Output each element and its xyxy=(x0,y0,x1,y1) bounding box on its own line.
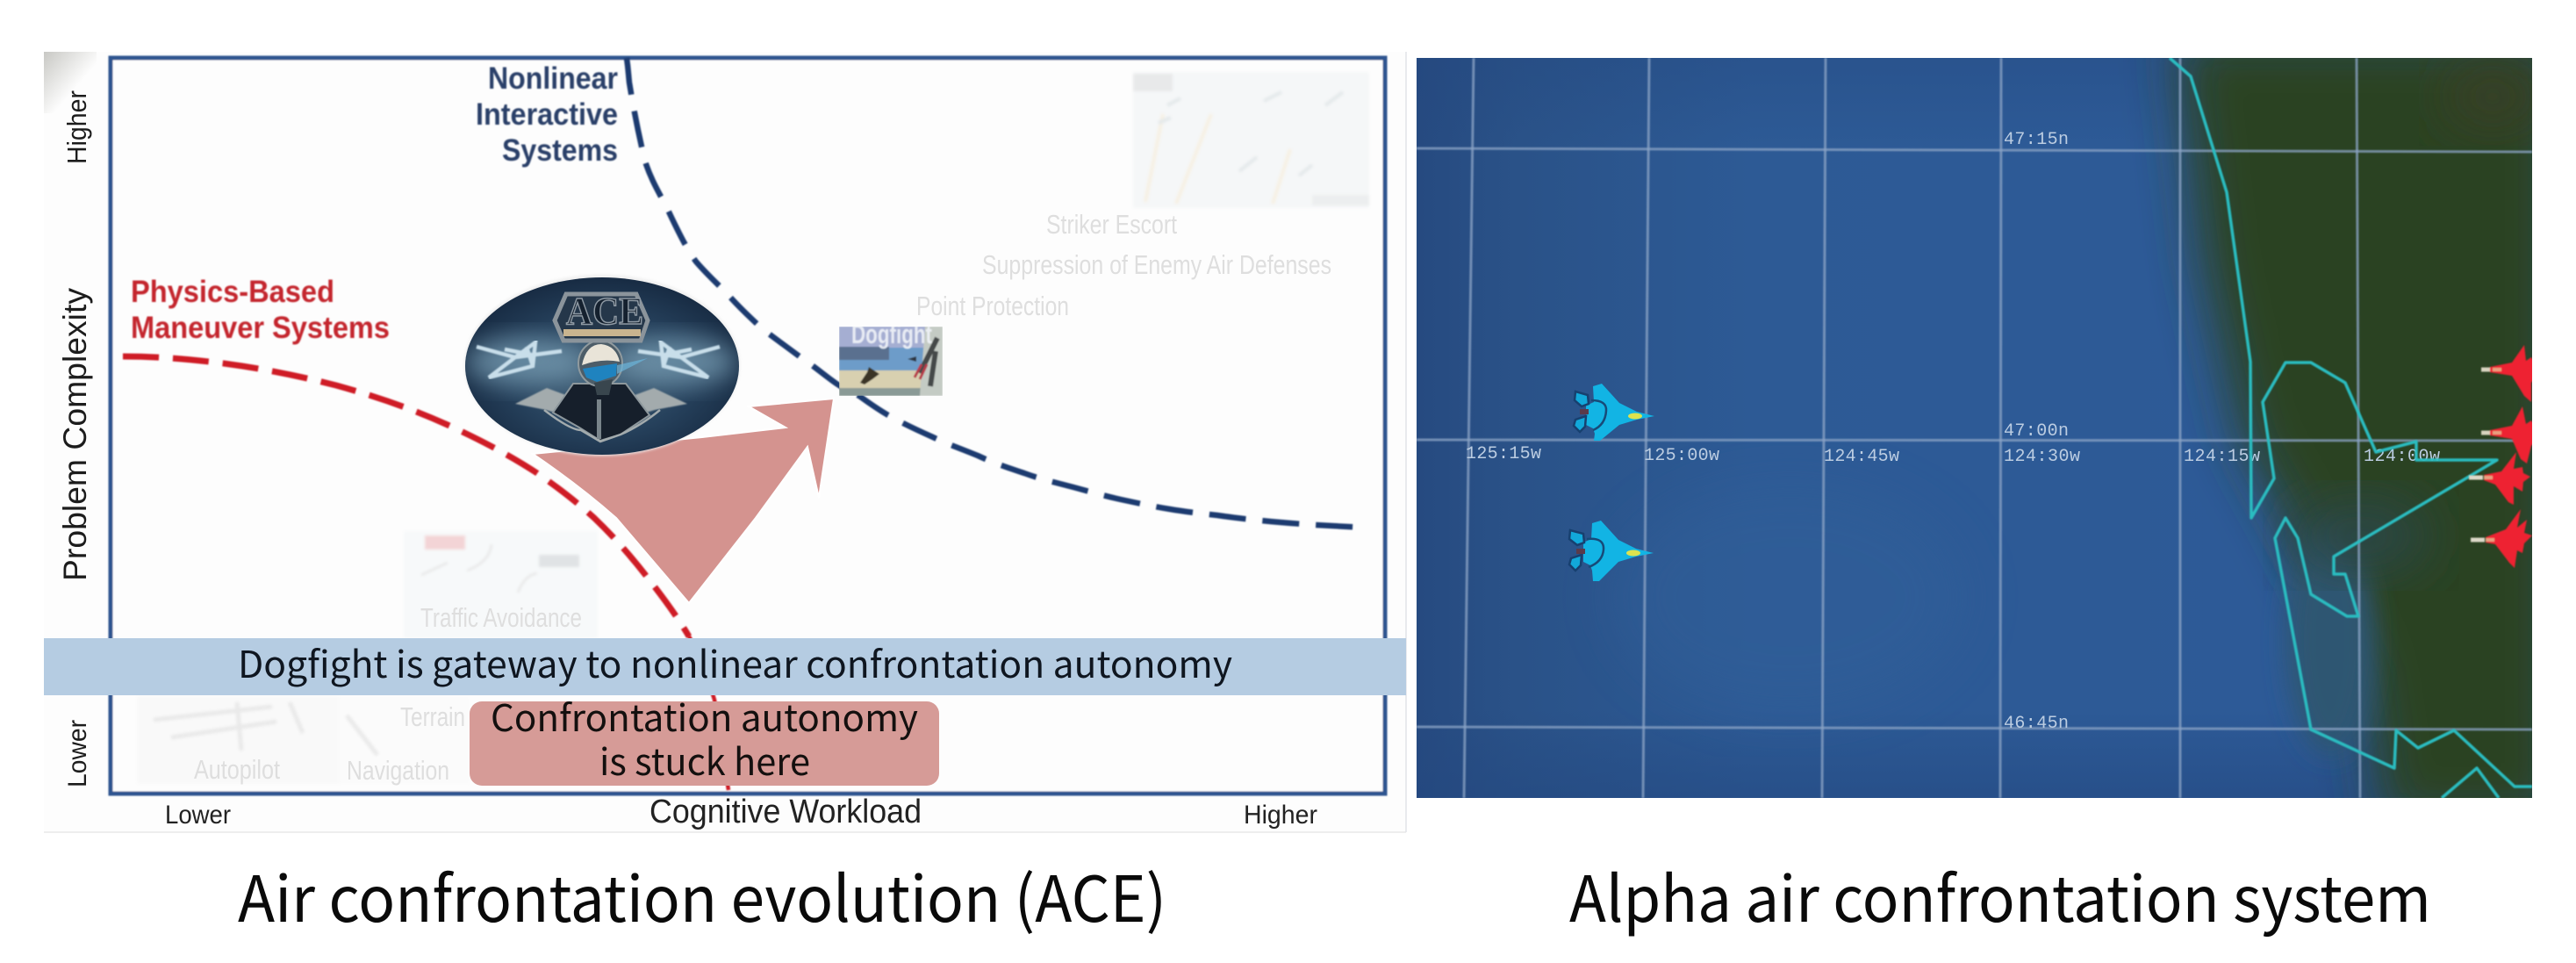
label: nonlinear interactive systems: Interactive xyxy=(476,97,618,132)
map coordinate labels: 125:00w xyxy=(1644,446,1719,466)
map coordinate labels: 124:45w xyxy=(1824,447,1899,467)
label: nonlinear interactive systems xyxy=(476,61,618,168)
y-axis title: problem complexity: Problem Complexity xyxy=(57,288,93,581)
icon: red fighter jet 2 xyxy=(2481,406,2535,464)
arrow: evolution toward dogfight xyxy=(533,399,834,603)
icon: red fighter jet 4 xyxy=(2471,509,2532,568)
faint task labels: Striker Escort xyxy=(1046,209,1177,240)
label: nonlinear interactive systems: Nonlinear xyxy=(488,61,618,96)
icon: blue fighter jet 1 xyxy=(1574,384,1654,441)
callout box: confrontation autonomy is stuck here: is stuck here xyxy=(599,733,810,787)
callout box: confrontation autonomy is stuck here: Confrontation autonomy xyxy=(491,689,918,743)
map coordinate labels: 46:45n xyxy=(2004,714,2069,734)
callout band: dogfight is gateway xyxy=(44,636,1406,695)
callout box: confrontation autonomy is stuck here xyxy=(470,689,939,787)
icon: red fighter jet 3 xyxy=(2469,452,2530,505)
faint label: traffic avoidance: Traffic Avoidance xyxy=(420,602,582,633)
callout band: dogfight is gateway: Dogfight is gateway to nonlinear confrontation autonomy xyxy=(238,636,1232,689)
icon: red fighter jet 1 xyxy=(2481,345,2535,402)
curve: physics-based maneuver systems xyxy=(123,356,728,790)
faint labels: low-level tasks: Terrain xyxy=(400,701,465,732)
map coordinate labels: 124:00w xyxy=(2364,447,2440,467)
icon: ACE programme emblem xyxy=(464,275,740,456)
faint thumbnail: traffic avoidance xyxy=(404,531,598,638)
curve: nonlinear interactive systems xyxy=(627,58,1368,528)
map coordinate labels: 47:15n xyxy=(2004,130,2069,150)
map coordinate labels xyxy=(1466,130,2440,734)
map grid lines xyxy=(1417,58,2532,798)
icon: dogfight thumbnail xyxy=(839,327,943,396)
coastline xyxy=(2170,58,2532,798)
label: nonlinear interactive systems: Systems xyxy=(502,133,618,168)
faint task labels: Point Protection xyxy=(916,291,1069,321)
icon: blue fighter jet 2 xyxy=(1569,521,1654,581)
map coordinate labels: 125:15w xyxy=(1466,444,1541,464)
caption: alpha air confrontation system: Alpha air confrontation system xyxy=(1569,848,2431,940)
faint task labels xyxy=(916,209,1331,321)
caption: air confrontation evolution: Air confrontation evolution (ACE) xyxy=(238,848,1166,940)
label: physics-based maneuver systems: Maneuver Systems xyxy=(131,311,390,345)
faint labels: low-level tasks: Autopilot xyxy=(194,754,280,785)
faint labels: low-level tasks xyxy=(194,701,465,786)
map coordinate labels: 124:30w xyxy=(2004,447,2080,467)
faint thumbnail: autopilot and navigation xyxy=(137,696,470,784)
label: physics-based maneuver systems xyxy=(131,275,390,345)
panel: air confrontation evolution chart xyxy=(44,52,1406,832)
map coordinate labels: 124:15w xyxy=(2184,447,2260,467)
faint thumbnail: top right mission map xyxy=(1133,72,1369,208)
icon: ACE programme emblem: ACE xyxy=(566,290,643,333)
faint task labels: Suppression of Enemy Air Defenses xyxy=(982,249,1331,280)
chart frame xyxy=(111,58,1385,794)
faint labels: low-level tasks: Navigation xyxy=(347,755,449,786)
x-axis title: cognitive workload: Cognitive Workload xyxy=(649,794,922,830)
map coordinate labels: 47:00n xyxy=(2004,421,2069,442)
label: physics-based maneuver systems: Physics-Based xyxy=(131,275,334,309)
x-axis tick: higher: Higher xyxy=(1244,801,1317,830)
icon: dogfight thumbnail: Dogfight xyxy=(851,319,932,349)
panel: alpha air confrontation map xyxy=(1417,35,2563,825)
y-axis tick: lower: Lower xyxy=(63,720,92,787)
x-axis tick: lower: Lower xyxy=(165,801,231,830)
y-axis tick: higher: Higher xyxy=(61,90,92,164)
